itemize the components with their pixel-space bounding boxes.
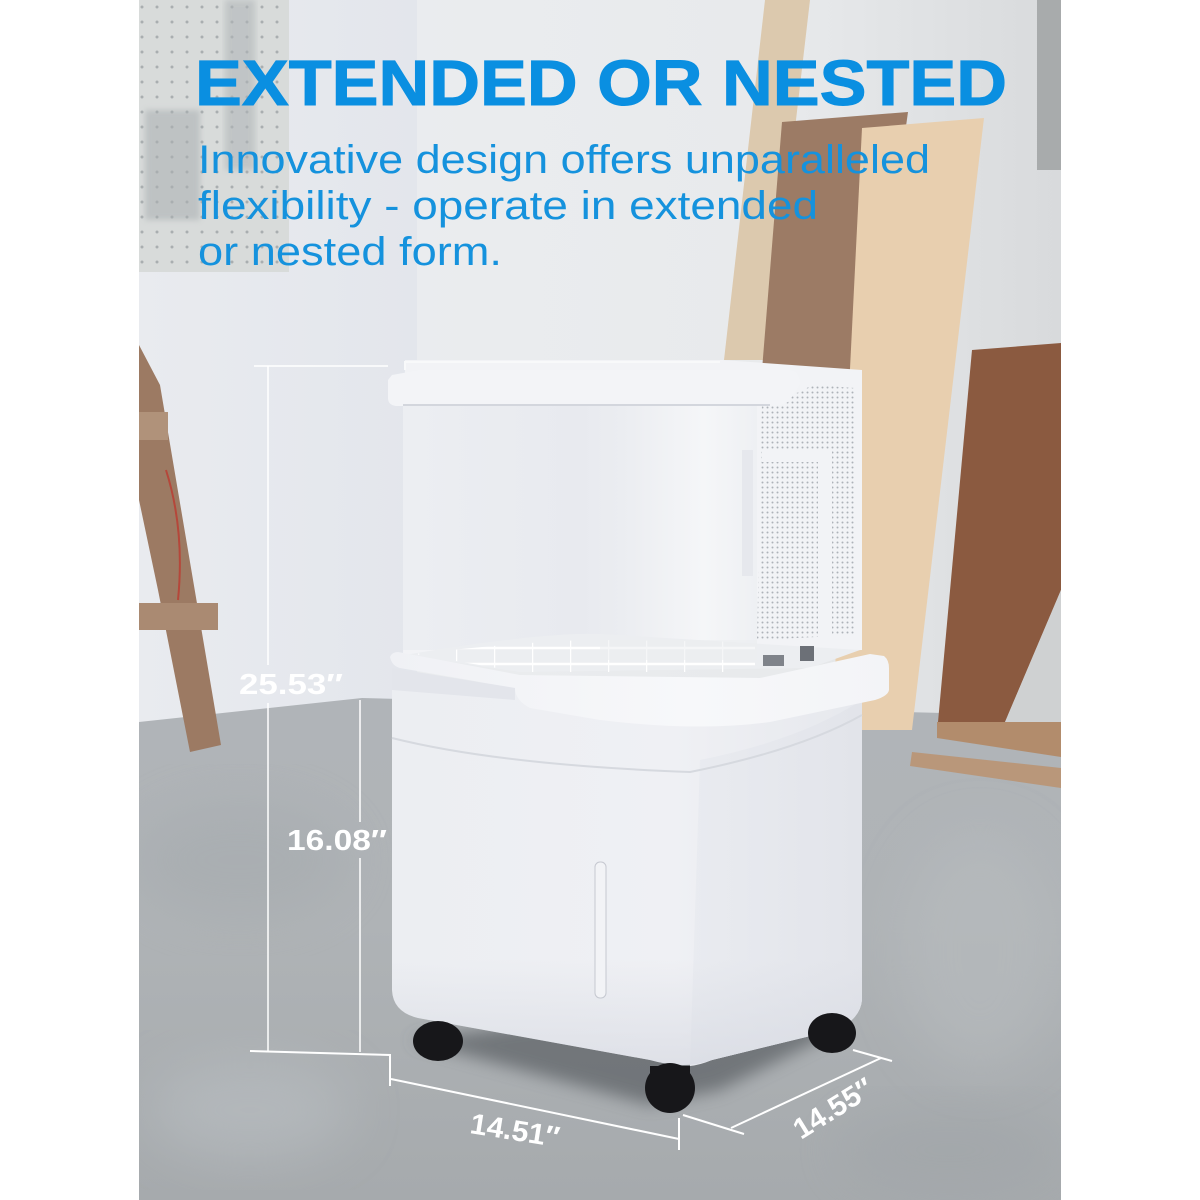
- subtitle: flexibility - operate in extended: [198, 184, 818, 228]
- bucket rim and crate: [390, 634, 889, 727]
- casters: [413, 1013, 856, 1113]
- infographic scene: [139, 0, 1061, 1200]
- label stickers: [763, 655, 784, 666]
- ladder: [139, 345, 221, 752]
- subtitle: or nested form.: [198, 230, 502, 274]
- title: EXTENDED OR NESTED: [195, 47, 1007, 119]
- wall: [417, 0, 1061, 714]
- floor: [130, 698, 1061, 1200]
- subtitle: Innovative design offers unparalleled: [198, 138, 930, 182]
- side vent: [742, 385, 855, 640]
- dehumidifier: [388, 360, 889, 1113]
- lid: [388, 370, 800, 406]
- floor shadow: [448, 1025, 818, 1112]
- pegboard: [139, 0, 289, 272]
- subtitle: [198, 138, 930, 274]
- wood planks: [724, 0, 1061, 788]
- lower bucket: [390, 634, 889, 1066]
- upper tank: [388, 360, 862, 660]
- dimension label 25.53: 25.53″: [239, 669, 343, 701]
- dimension label 14.51: 14.51″: [468, 1108, 562, 1154]
- water level window: [595, 862, 606, 998]
- dimension label 16.08: 16.08″: [287, 825, 387, 857]
- dimension label 14.55: 14.55″: [788, 1072, 879, 1146]
- dimension lines: [250, 366, 892, 1150]
- photo background: [130, 0, 1061, 1200]
